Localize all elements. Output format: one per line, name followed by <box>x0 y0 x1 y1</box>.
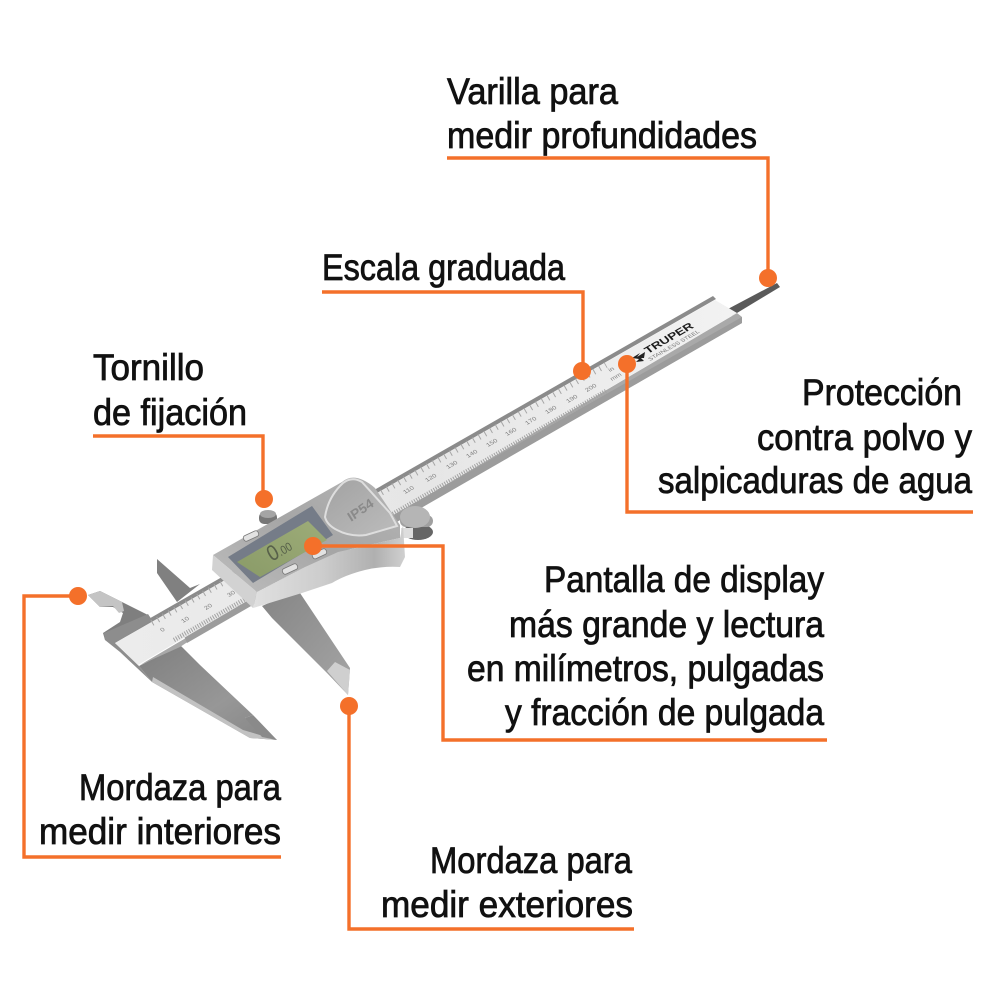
body front left face <box>212 555 257 608</box>
fixing screw <box>259 510 277 524</box>
screen bezel <box>228 506 333 583</box>
protection text <box>658 372 972 501</box>
label: depth rod <box>447 71 777 287</box>
fixed head <box>104 614 152 682</box>
screw text: Tornillo <box>93 347 204 388</box>
screw text: de fijación <box>93 392 247 433</box>
rear fixed jaw <box>88 591 148 643</box>
brand mark <box>632 352 645 362</box>
scale face <box>115 300 737 665</box>
protection text: salpicaduras de agua <box>658 460 972 501</box>
scale numbers: 110 <box>402 485 416 495</box>
outer jaw text <box>381 840 633 925</box>
depth rod dot <box>759 269 777 287</box>
LCD screen <box>237 521 327 577</box>
inner jaw text: Mordaza para <box>79 767 281 808</box>
protection text: Protección <box>802 372 962 413</box>
body top face <box>213 478 400 592</box>
inner jaw text: medir interiores <box>39 811 281 852</box>
display text <box>467 559 824 733</box>
brand name: TRUPER <box>641 320 697 356</box>
slider body <box>212 478 405 608</box>
display text: y fracción de pulgada <box>505 692 824 733</box>
beam lower side band <box>140 313 742 665</box>
inner jaw leader <box>24 596 281 857</box>
sliding lower jaw <box>262 590 350 695</box>
depth rod text: medir profundidades <box>447 115 757 156</box>
depth rod <box>726 283 780 316</box>
scale numbers: 180 <box>544 405 559 415</box>
scale numbers: 30 <box>226 590 237 598</box>
screw dot <box>255 490 273 508</box>
label: display <box>304 537 827 740</box>
button bottom <box>281 563 299 575</box>
brand subtitle: STAINLESS STEEL <box>648 329 702 362</box>
depth rod text: Varilla para <box>447 71 618 112</box>
screw text <box>93 347 247 433</box>
scale numbers: 200 <box>584 383 599 393</box>
label: inner jaw <box>24 587 281 857</box>
scale numbers: 130 <box>445 460 460 470</box>
button right <box>311 548 328 560</box>
LCD reading: 0.00 <box>262 532 296 567</box>
screw leader <box>93 436 263 499</box>
bottom millimetre ticks <box>174 391 606 640</box>
scale leader <box>322 292 583 371</box>
label: fixing screw <box>93 347 273 508</box>
fixed lower jaw <box>139 645 277 740</box>
scale numbers: 170 <box>524 416 539 426</box>
display text: Pantalla de display <box>544 559 824 600</box>
outer jaw text: Mordaza para <box>430 840 632 881</box>
button top <box>242 530 260 542</box>
depth rod text <box>447 71 757 156</box>
outer jaw text: medir exteriores <box>381 884 633 925</box>
IP54 cover <box>325 479 397 535</box>
scale numbers: 0 <box>159 627 167 633</box>
scale numbers: 120 <box>424 473 439 483</box>
scale numbers <box>159 366 623 633</box>
locking wheel <box>400 506 433 540</box>
scale numbers: 150 <box>485 438 500 448</box>
rear sliding jaw <box>157 559 200 602</box>
protection text: contra polvo y <box>757 417 972 458</box>
illustration: digital caliper <box>88 283 780 740</box>
scale numbers: 10 <box>180 616 191 624</box>
brand logo <box>632 320 702 362</box>
display dot <box>304 537 322 555</box>
display text: más grande y lectura <box>509 604 824 645</box>
scale numbers: 160 <box>504 427 519 437</box>
scale numbers: 190 <box>565 394 580 404</box>
body front right face <box>253 525 405 608</box>
scale text: Escala graduada <box>322 247 565 288</box>
outer jaw dot <box>340 697 358 715</box>
depth rod leader <box>447 158 768 278</box>
scale dot <box>573 362 591 380</box>
display leader <box>313 546 827 740</box>
protection leader <box>627 365 973 512</box>
label: outer jaw <box>340 697 634 929</box>
scale numbers: in <box>607 366 616 373</box>
scale numbers: 20 <box>203 603 214 611</box>
beam <box>104 296 742 682</box>
label: graduated scale <box>322 247 591 380</box>
scale numbers: mm <box>609 372 623 382</box>
protection dot <box>618 355 636 373</box>
display text: en milímetros, pulgadas <box>467 648 824 689</box>
beam rear rail <box>112 296 716 643</box>
label: dust and water protection <box>618 355 973 512</box>
outer jaw leader <box>349 706 634 929</box>
inner jaw text <box>39 767 281 852</box>
scale numbers: 140 <box>465 449 480 459</box>
inner jaw dot <box>69 587 87 605</box>
top inch ticks <box>152 365 606 623</box>
IP54 mark: IP54 <box>345 495 377 524</box>
